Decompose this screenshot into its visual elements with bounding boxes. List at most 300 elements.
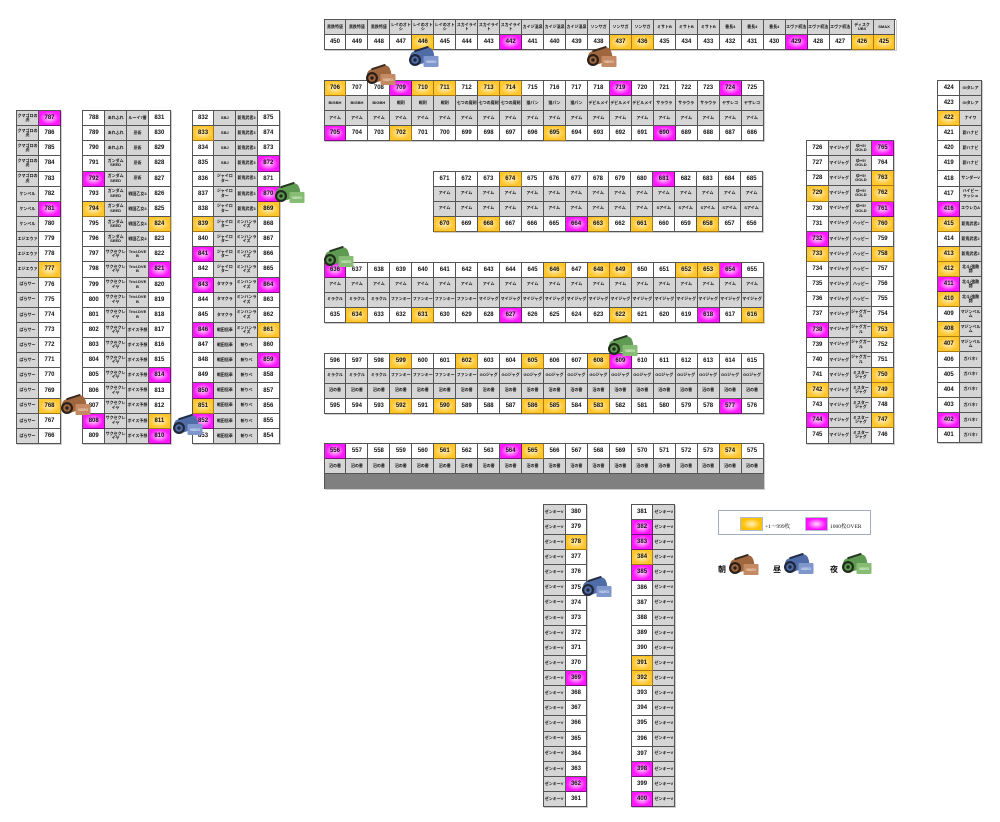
panel: island 832-853 / 875-854: 843 bbox=[198, 282, 208, 288]
panel: bottom column 380-361: ゼンキーV bbox=[545, 524, 563, 529]
panel: island 788-809 / 831-810: 810 bbox=[154, 433, 164, 439]
panel: island 788-809 / 831-810: 816 bbox=[154, 342, 164, 348]
panel: island 832-853 / 875-854: 868 bbox=[263, 221, 273, 227]
panel: island 636-655 / 635-616: 642 bbox=[462, 267, 472, 273]
panel: island 636-655 / 635-616: アイム bbox=[592, 281, 604, 286]
panel: island 726-745 / 765-746: 748 bbox=[878, 402, 888, 408]
panel: island 788-809 / 831-810: ガンダム bbox=[108, 158, 124, 163]
panel: island 596-615 / 595-576: 610 bbox=[637, 358, 647, 364]
panel: island 832-853 / 875-854: 862 bbox=[263, 312, 273, 318]
panel: left wall column 787-766: 774 bbox=[44, 312, 54, 318]
panel: island 636-655 / 635-616: アイム bbox=[680, 281, 692, 286]
panel: island 788-809 / 831-810: 825 bbox=[154, 206, 164, 212]
panel: island 706-725 / 705-686: デビルメイ bbox=[610, 100, 630, 105]
panel: top row 450-425: 439 bbox=[572, 39, 582, 45]
panel: left wall column 787-766: ばらサー bbox=[20, 433, 36, 438]
panel: island 596-615 / 595-576: 603 bbox=[484, 358, 494, 364]
panel: island 726-745 / 765-746: ジャグガー bbox=[851, 324, 871, 329]
panel: island 788-809 / 831-810: Tricl.DVE B bbox=[129, 294, 146, 304]
panel: bottom column 380-361: ゼンキーV bbox=[545, 554, 563, 559]
panel: top row 450-425: スカイライ bbox=[479, 22, 499, 27]
panel: island 726-745 / 765-746: 731 bbox=[812, 221, 822, 227]
panel: island 596-615 / 595-576: 589 bbox=[462, 403, 472, 409]
panel: island 726-745 / 765-746: マイジャグ bbox=[829, 417, 849, 422]
panel: island 596-615 / 595-576: 608 bbox=[593, 358, 603, 364]
panel: left wall column 787-766: ケンペル bbox=[20, 191, 35, 196]
panel: island 706-725 / 705-686: 691 bbox=[637, 130, 647, 136]
panel: top row 450-425: 449 bbox=[352, 39, 362, 45]
panel: island 671-685 / 670-656: アイム bbox=[570, 190, 582, 195]
panel: island 636-655 / 635-616: 617 bbox=[725, 312, 735, 318]
panel: island 788-809 / 831-810: 820 bbox=[154, 282, 164, 288]
panel: island 671-685 / 670-656: 657 bbox=[725, 221, 735, 227]
panel: island 832-853 / 875-854: ミンハンラ bbox=[237, 219, 257, 224]
panel: right wall column 424-401: 412 bbox=[944, 266, 954, 272]
panel: top row 450-425: ミサトB bbox=[679, 24, 694, 29]
panel: island 596-615 / 595-576: GOジャグ bbox=[721, 372, 739, 377]
panel: island 636-655 / 635-616: マイジャグ bbox=[742, 296, 762, 301]
panel: island 726-745 / 765-746: GOLD bbox=[855, 147, 867, 152]
panel: island 832-853 / 875-854: 新鬼武者3 bbox=[237, 160, 256, 165]
panel: island 556-575 with grey wall: 563 bbox=[484, 448, 494, 454]
panel: island 636-655 / 635-616: ファンキー bbox=[391, 296, 411, 301]
panel: right wall column 424-401: 423 bbox=[944, 100, 954, 106]
panel: island 788-809 / 831-810: 戦国乙女4 bbox=[128, 206, 147, 211]
panel: island 636-655 / 635-616: 632 bbox=[396, 312, 406, 318]
panel: island 596-615 / 595-576: 587 bbox=[506, 403, 516, 409]
panel: top row 450-425: ト bbox=[487, 26, 491, 31]
panel: island 788-809 / 831-810: 戦国乙女4 bbox=[128, 236, 147, 241]
panel: island 726-745 / 765-746: 729 bbox=[812, 190, 822, 196]
panel: right wall column 424-401: ム bbox=[969, 328, 973, 333]
panel: island 556-575 with grey wall: 570 bbox=[637, 448, 647, 454]
panel: island 556-575 with grey wall: 沼の番 bbox=[483, 463, 495, 468]
panel: left wall column 787-766: 776 bbox=[44, 282, 54, 288]
panel: island 556-575 with grey wall: 558 bbox=[374, 448, 384, 454]
panel: island 671-685 / 670-656: 665 bbox=[549, 221, 559, 227]
panel: island 788-809 / 831-810: サクセクレ bbox=[106, 264, 126, 269]
panel: island 671-685 / 670-656: アイム bbox=[504, 205, 516, 210]
panel: bottom column 380-361: ゼンキーV bbox=[545, 509, 563, 514]
panel: island 832-853 / 875-854: ミンハンラ bbox=[237, 294, 257, 299]
panel: bottom column 380-361: 366 bbox=[571, 720, 581, 726]
panel: right wall column 424-401: ナイワ bbox=[965, 115, 977, 120]
panel: bottom column 381-400 bbox=[631, 504, 675, 807]
panel: island 636-655 / 635-616: アイム bbox=[724, 281, 736, 286]
panel: island 788-809 / 831-810: SEED bbox=[110, 238, 121, 243]
panel: island 726-745 / 765-746: ゆ+5! bbox=[856, 173, 866, 178]
panel: bottom column 380-361: ゼンキーV bbox=[545, 675, 563, 680]
panel: island 832-853 / 875-854: 848 bbox=[198, 357, 208, 363]
panel: right wall column 424-401: 411 bbox=[944, 281, 954, 287]
panel: island 636-655 / 635-616: 625 bbox=[549, 312, 559, 318]
panel: bottom column 381-400: 393 bbox=[637, 690, 647, 696]
panel: island 788-809 / 831-810: 807 bbox=[89, 403, 99, 409]
panel: island 596-615 / 595-576: 583 bbox=[593, 403, 603, 409]
panel: bottom column 380-361: 368 bbox=[571, 690, 581, 696]
panel: island 726-745 / 765-746: マイジャグ bbox=[829, 432, 849, 437]
panel: top row 450-425: 427 bbox=[835, 39, 845, 45]
panel: island 596-615 / 595-576: 611 bbox=[659, 358, 669, 364]
panel: left wall column 787-766: 773 bbox=[44, 327, 54, 333]
panel: island 671-685 / 670-656: アイム bbox=[548, 190, 560, 195]
panel: left wall column 787-766: 781 bbox=[44, 206, 54, 212]
panel: island 726-745 / 765-746: ゆ+5! bbox=[856, 203, 866, 208]
panel: island 596-615 / 595-576: 599 bbox=[396, 358, 406, 364]
panel: island 596-615 / 595-576: 577 bbox=[725, 403, 735, 409]
panel: island 706-725 / 705-686: 699 bbox=[462, 130, 472, 136]
panel: island 706-725 / 705-686: 猫パン bbox=[548, 100, 561, 105]
panel: island 596-615 / 595-576: 沼の番 bbox=[461, 387, 473, 392]
panel: island 706-725 / 705-686: BIGBH bbox=[372, 100, 385, 105]
panel: right wall column 424-401: 新鬼武者2 bbox=[961, 236, 980, 241]
panel: bottom column 380-361: 380 bbox=[571, 509, 581, 515]
panel: island 596-615 / 595-576: 591 bbox=[418, 403, 428, 409]
panel: island 832-853 / 875-854: 864 bbox=[263, 282, 273, 288]
panel: island 596-615 / 595-576: GOジャグ bbox=[743, 372, 761, 377]
panel: island 726-745 / 765-746: ハッピー bbox=[853, 251, 869, 256]
panel: island 788-809 / 831-810: ボイス予想 bbox=[128, 372, 147, 377]
panel: island 788-809 / 831-810: 806 bbox=[89, 388, 99, 394]
panel: island 726-745 / 765-746: ハッピー bbox=[853, 266, 869, 271]
panel: island 671-685 / 670-656: アイム bbox=[439, 190, 450, 195]
panel: island 726-745 / 765-746: 764 bbox=[878, 160, 888, 166]
panel: top row 450-425: ミサトB bbox=[701, 24, 716, 29]
panel: island 832-853 / 875-854: イズ bbox=[243, 268, 250, 273]
panel: top row 450-425: 440 bbox=[550, 39, 560, 45]
panel: island 788-809 / 831-810: 818 bbox=[154, 312, 164, 318]
panel: right wall column 424-401: 北斗/強敵 bbox=[962, 279, 979, 284]
panel: island 832-853 / 875-854: 858 bbox=[263, 372, 273, 378]
panel: top row 450-425: UBX bbox=[858, 26, 866, 31]
panel: bottom column 380-361: 362 bbox=[571, 781, 581, 787]
panel: left wall column 787-766: 766 bbox=[44, 433, 54, 439]
panel: bottom column 380-361: 363 bbox=[571, 766, 581, 772]
panel: island 556-575 with grey wall bbox=[324, 443, 764, 489]
panel: island 832-853 / 875-854: 865 bbox=[263, 266, 273, 272]
panel: island 706-725 / 705-686: 719 bbox=[615, 85, 625, 91]
panel: island 832-853 / 875-854: 戦田信奉 bbox=[217, 418, 233, 423]
panel: island 706-725 / 705-686: 猫パン bbox=[526, 100, 539, 105]
panel: right wall column 424-401: 新鬼武者2 bbox=[961, 221, 980, 226]
panel: right wall column 424-401: 418 bbox=[944, 176, 954, 182]
panel: island 832-853 / 875-854: 戦田信奉 bbox=[217, 402, 233, 407]
panel: island 726-745 / 765-746: マイジャグ bbox=[829, 220, 849, 225]
panel: bottom column 381-400: ゼンキーV bbox=[654, 750, 673, 755]
panel: island 636-655 / 635-616: 626 bbox=[528, 312, 538, 318]
panel: island 832-853 / 875-854: ミンハンラ bbox=[237, 279, 257, 284]
panel: island 788-809 / 831-810: ボイス予想 bbox=[128, 387, 147, 392]
panel: island 788-809 / 831-810: 827 bbox=[154, 176, 164, 182]
panel: island 636-655 / 635-616: 636 bbox=[330, 267, 340, 273]
panel: right wall column 424-401: 404 bbox=[944, 387, 954, 393]
panel: top row 450-425: ト bbox=[509, 26, 513, 31]
panel: island 556-575 with grey wall: 沼の番 bbox=[724, 463, 736, 468]
panel: bottom column 381-400: ゼンキーV bbox=[654, 539, 673, 544]
panel: island 788-809 / 831-810: 814 bbox=[154, 372, 164, 378]
panel: island 706-725 / 705-686: 720 bbox=[637, 85, 647, 91]
panel: island 636-655 / 635-616 bbox=[324, 262, 764, 323]
panel: island 788-809 / 831-810: サクセクレ bbox=[106, 385, 126, 390]
panel: island 788-809 / 831-810: SEED bbox=[110, 178, 121, 183]
panel: island 671-685 / 670-656: 674 bbox=[505, 176, 515, 182]
panel: island 706-725 / 705-686: 702 bbox=[396, 130, 406, 136]
panel: left wall column 787-766: クマゴロの bbox=[18, 113, 38, 118]
panel: island 636-655 / 635-616: 652 bbox=[681, 267, 691, 273]
panel: right wall column 424-401: 410 bbox=[944, 296, 954, 302]
panel: island 832-853 / 875-854: 872 bbox=[263, 160, 273, 166]
panel: island 726-745 / 765-746: 726 bbox=[812, 145, 822, 151]
panel: island 556-575 with grey wall: 沼の番 bbox=[505, 463, 517, 468]
panel: right wall column 424-401: ム bbox=[969, 343, 973, 348]
panel: island 706-725 / 705-686: アイム bbox=[636, 115, 648, 120]
panel: island 596-615 / 595-576 bbox=[324, 353, 764, 414]
panel: island 636-655 / 635-616: マイジャグ bbox=[676, 296, 696, 301]
panel: island 832-853 / 875-854: タマクラ bbox=[217, 312, 233, 317]
panel: island 636-655 / 635-616: 624 bbox=[571, 312, 581, 318]
panel: island 671-685 / 670-656: アイム bbox=[614, 205, 626, 210]
panel: bottom column 380-361: 378 bbox=[571, 539, 581, 545]
panel: top row 450-425: 442 bbox=[506, 39, 516, 45]
panel: island 726-745 / 765-746: 760 bbox=[878, 221, 888, 227]
panel: island 706-725 / 705-686: サラウラ bbox=[678, 100, 694, 105]
panel: island 706-725 / 705-686: 693 bbox=[593, 130, 603, 136]
panel: island 832-853 / 875-854: SBJ bbox=[221, 130, 229, 135]
panel: right wall column 424-401: GIタレア bbox=[962, 85, 979, 90]
panel: island 636-655 / 635-616: アイム bbox=[614, 281, 626, 286]
panel: island 556-575 with grey wall: 沼の番 bbox=[746, 463, 758, 468]
panel: bottom column 380-361: 379 bbox=[571, 524, 581, 530]
panel: island 671-685 / 670-656: アイム bbox=[504, 190, 516, 195]
panel: island 788-809 / 831-810: 792 bbox=[89, 176, 99, 182]
panel: bottom column 381-400: ゼンキーV bbox=[654, 569, 673, 574]
panel: island 636-655 / 635-616: 620 bbox=[659, 312, 669, 318]
panel: island 596-615 / 595-576: 579 bbox=[681, 403, 691, 409]
panel: island 636-655 / 635-616: 621 bbox=[637, 312, 647, 318]
panel: island 596-615 / 595-576: ファンキー bbox=[435, 372, 455, 377]
panel: island 726-745 / 765-746: ジャグ bbox=[855, 419, 867, 424]
panel: island 671-685 / 670-656: 669 bbox=[461, 221, 471, 227]
panel: island 636-655 / 635-616: マイジャグ bbox=[720, 296, 740, 301]
panel: island 706-725 / 705-686: アイム bbox=[680, 115, 692, 120]
panel: island 788-809 / 831-810: サクセクレ bbox=[106, 309, 126, 314]
panel: left wall column 787-766: 虎 bbox=[26, 178, 30, 183]
panel: island 706-725 / 705-686: BIGBH bbox=[350, 100, 363, 105]
panel: island 596-615 / 595-576: 沼の番 bbox=[636, 387, 648, 392]
panel: top row 450-425: 438 bbox=[594, 39, 604, 45]
panel: island 706-725 / 705-686: 718 bbox=[593, 85, 603, 91]
panel: island 726-745 / 765-746: 743 bbox=[812, 402, 822, 408]
legend label: magenta: 1000枚OVER bbox=[830, 524, 861, 530]
panel: island 788-809 / 831-810: SEED bbox=[110, 162, 121, 167]
panel: island 726-745 / 765-746: 730 bbox=[812, 206, 822, 212]
panel: island 832-853 / 875-854: ター bbox=[221, 238, 229, 243]
panel: right wall column 424-401: 424 bbox=[944, 85, 954, 91]
panel: bottom column 380-361: 377 bbox=[571, 554, 581, 560]
panel: island 636-655 / 635-616: マイジャグ bbox=[479, 296, 499, 301]
panel: bottom column 380-361: ゼンキーV bbox=[545, 539, 563, 544]
panel: island 596-615 / 595-576: 586 bbox=[528, 403, 538, 409]
panel: island 726-745 / 765-746: ジャグ bbox=[855, 389, 867, 394]
panel: island 788-809 / 831-810: イヤ bbox=[112, 253, 120, 258]
panel: island 706-725 / 705-686: サラウラ bbox=[656, 100, 672, 105]
panel: island 596-615 / 595-576: 596 bbox=[330, 358, 340, 364]
panel: island 832-853 / 875-854: ジャイロ bbox=[217, 173, 233, 178]
panel: island 726-745 / 765-746: ル bbox=[859, 359, 863, 364]
panel: island 706-725 / 705-686: サラウラ bbox=[700, 100, 716, 105]
panel: left wall column 787-766: 780 bbox=[44, 221, 54, 227]
panel: island 832-853 / 875-854: 847 bbox=[198, 342, 208, 348]
panel: right wall column 424-401: 407 bbox=[944, 341, 954, 347]
panel: island 556-575 with grey wall: 571 bbox=[659, 448, 669, 454]
panel: island 788-809 / 831-810: 824 bbox=[154, 221, 164, 227]
panel: island 726-745 / 765-746: 754 bbox=[878, 311, 888, 317]
panel: island 832-853 / 875-854: 戦田信奉 bbox=[217, 387, 233, 392]
panel: island 596-615 / 595-576: 沼の番 bbox=[570, 387, 582, 392]
panel: island 671-685 / 670-656: Sアイム bbox=[700, 205, 715, 210]
panel: island 596-615 / 595-576: 593 bbox=[374, 403, 384, 409]
panel: bottom column 381-400: 397 bbox=[637, 751, 647, 757]
panel: island 832-853 / 875-854: イズ bbox=[243, 238, 250, 243]
panel: island 788-809 / 831-810: イヤ bbox=[112, 359, 120, 364]
panel: island 636-655 / 635-616: 633 bbox=[374, 312, 384, 318]
panel: left wall column 787-766: 784 bbox=[44, 160, 54, 166]
panel: island 556-575 with grey wall: 569 bbox=[615, 448, 625, 454]
panel: island 556-575 with grey wall: 559 bbox=[396, 448, 406, 454]
panel: island 556-575 with grey wall: 565 bbox=[528, 448, 538, 454]
panel: island 788-809 / 831-810: ガンダム bbox=[108, 173, 124, 178]
panel: top row 450-425: ソンサガ bbox=[634, 24, 650, 29]
panel: island 636-655 / 635-616: 627 bbox=[506, 312, 516, 318]
panel: island 788-809 / 831-810: イヤ bbox=[112, 435, 120, 440]
panel: island 596-615 / 595-576: 584 bbox=[571, 403, 581, 409]
panel: island 706-725 / 705-686: 七つの魔剣 bbox=[501, 100, 521, 105]
panel: island 596-615 / 595-576: 600 bbox=[418, 358, 428, 364]
panel: right wall column 424-401: 408 bbox=[944, 326, 954, 332]
panel: left wall column 787-766: ばらサー bbox=[20, 418, 36, 423]
panel: island 788-809 / 831-810: ボイス予想 bbox=[128, 418, 147, 423]
panel: island 726-745 / 765-746: マイジャグ bbox=[829, 372, 849, 377]
panel: island 556-575 with grey wall: 沼の番 bbox=[527, 463, 539, 468]
panel: right wall column 424-401: 405 bbox=[944, 372, 954, 378]
panel: island 706-725 / 705-686: アイム bbox=[527, 115, 538, 120]
panel: right wall column 424-401: エウレカA bbox=[961, 205, 980, 210]
panel: island 832-853 / 875-854: ター bbox=[221, 268, 229, 273]
panel: island 636-655 / 635-616: 654 bbox=[725, 267, 735, 273]
panel: island 788-809 / 831-810: サクセクレ bbox=[106, 249, 126, 254]
panel: left wall column 787-766: ばらサー bbox=[20, 312, 36, 317]
panel: island 671-685 / 670-656: アイム bbox=[570, 205, 582, 210]
panel: island 788-809 / 831-810: 803 bbox=[89, 342, 99, 348]
panel: island 671-685 / 670-656: アイム bbox=[526, 205, 538, 210]
legend label: yellow: +1～999枚 bbox=[765, 524, 790, 530]
panel: island 726-745 / 765-746: マイジャグ bbox=[829, 387, 849, 392]
icon: blue camera beside 852 bbox=[173, 414, 202, 435]
panel: island 596-615 / 595-576: ミラクル bbox=[349, 372, 365, 377]
panel: island 726-745 / 765-746: ジャグガー bbox=[851, 339, 871, 344]
panel: island 596-615 / 595-576: 沼の番 bbox=[417, 387, 429, 392]
panel: right wall column 424-401: マジンベル bbox=[961, 339, 981, 344]
panel: island 556-575 with grey wall: 560 bbox=[418, 448, 428, 454]
panel: right wall column 424-401: 闘 bbox=[969, 298, 973, 303]
panel: island 726-745 / 765-746: マイジャグ bbox=[829, 236, 849, 241]
panel: island 788-809 / 831-810: サクセクレ bbox=[106, 279, 126, 284]
panel: island 596-615 / 595-576: 612 bbox=[681, 358, 691, 364]
panel: top row 450-425: SMAX bbox=[878, 24, 890, 29]
panel: island 706-725 / 705-686: 713 bbox=[484, 85, 494, 91]
panel: top row 450-425: 450 bbox=[330, 39, 340, 45]
panel: island 788-809 / 831-810: 808 bbox=[89, 418, 99, 424]
panel: island 671-685 / 670-656: アイム bbox=[658, 190, 670, 195]
panel: island 788-809 / 831-810: 830 bbox=[154, 130, 164, 136]
panel: island 596-615 / 595-576: 沼の番 bbox=[395, 387, 407, 392]
legend icon: blue camera bbox=[784, 553, 814, 574]
panel: bottom column 381-400: ゼンキーV bbox=[654, 615, 673, 620]
panel: island 596-615 / 595-576: ファンキー bbox=[457, 372, 477, 377]
panel: bottom column 381-400: 392 bbox=[637, 675, 647, 681]
panel: island 556-575 with grey wall: 沼の番 bbox=[680, 463, 692, 468]
panel: island 788-809 / 831-810: 819 bbox=[154, 297, 164, 303]
panel: island 636-655 / 635-616: 647 bbox=[571, 267, 581, 273]
panel: top row 450-425: 426 bbox=[857, 39, 867, 45]
panel: left wall column 787-766: ばらサー bbox=[20, 372, 36, 377]
panel: island 636-655 / 635-616: 639 bbox=[396, 267, 406, 273]
panel: island 832-853 / 875-854: ター bbox=[221, 223, 229, 228]
panel: island 788-809 / 831-810: 811 bbox=[155, 418, 164, 424]
panel: island 706-725 / 705-686: アイム bbox=[351, 115, 363, 120]
panel: island 726-745 / 765-746: 749 bbox=[878, 387, 888, 393]
panel: bottom column 380-361: 376 bbox=[571, 569, 581, 575]
panel: island 832-853 / 875-854: ジャイロ bbox=[217, 188, 233, 193]
panel: island 788-809 / 831-810: Tricl.DVE B bbox=[129, 309, 146, 319]
panel: island 832-853 / 875-854: 867 bbox=[263, 236, 273, 242]
panel: island 726-745 / 765-746: 758 bbox=[878, 251, 888, 257]
panel: island 556-575 with grey wall: 沼の番 bbox=[614, 463, 626, 468]
panel: island 832-853 / 875-854: 斬りべ bbox=[241, 387, 253, 392]
panel: island 832-853 / 875-854: 戦田信奉 bbox=[217, 372, 233, 377]
panel: island 636-655 / 635-616: 645 bbox=[528, 267, 538, 273]
panel: left wall column 787-766: 778 bbox=[44, 251, 54, 257]
panel: island 726-745 / 765-746: 763 bbox=[878, 175, 888, 181]
panel: top row 450-425: ソンサガ bbox=[612, 24, 628, 29]
panel: island 706-725 / 705-686: 696 bbox=[528, 130, 538, 136]
panel: island 726-745 / 765-746: 739 bbox=[812, 342, 822, 348]
panel: island 706-725 / 705-686: 710 bbox=[418, 85, 428, 91]
panel: island 671-685 / 670-656: 677 bbox=[571, 176, 581, 182]
icon: green camera above 609 bbox=[608, 335, 638, 356]
panel: island 788-809 / 831-810: 戦国乙女4 bbox=[128, 191, 147, 196]
panel: island 706-725 / 705-686: 722 bbox=[681, 85, 691, 91]
panel: island 788-809 / 831-810: イヤ bbox=[112, 420, 120, 425]
panel: bottom column 381-400: 400 bbox=[637, 796, 647, 802]
panel: left wall column 787-766: クマゴロの bbox=[18, 173, 38, 178]
panel: island 636-655 / 635-616: アイム bbox=[505, 281, 516, 286]
panel: island 556-575 with grey wall: 沼の番 bbox=[417, 463, 429, 468]
panel: island 671-685 / 670-656: アイム bbox=[482, 190, 494, 195]
panel: top row 450-425: 番長4 bbox=[725, 24, 735, 29]
panel: top row 450-425: 446 bbox=[418, 39, 428, 45]
panel: left wall column 787-766: エジエウァ bbox=[18, 266, 38, 271]
panel: right wall column 424-401: 新ハナビ bbox=[963, 145, 979, 150]
panel: island 636-655 / 635-616: 623 bbox=[593, 312, 603, 318]
panel: island 832-853 / 875-854: 874 bbox=[263, 130, 273, 136]
panel: island 832-853 / 875-854: 869 bbox=[263, 206, 273, 212]
panel: island 636-655 / 635-616: 646 bbox=[549, 267, 559, 273]
panel: island 726-745 / 765-746: 752 bbox=[878, 342, 888, 348]
panel: island 726-745 / 765-746: ゆ+5! bbox=[856, 158, 866, 163]
panel: island 832-853 / 875-854: イズ bbox=[243, 223, 250, 228]
panel: island 671-685 / 670-656: 675 bbox=[527, 176, 537, 182]
